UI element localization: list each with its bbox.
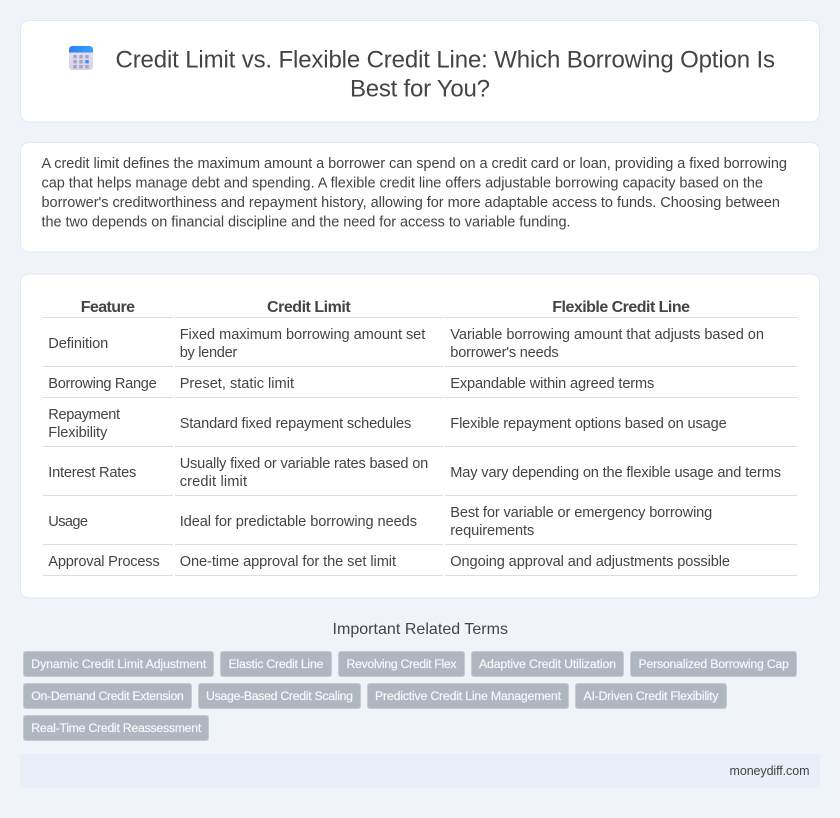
table header row [81,299,690,316]
heading: related terms: Important Related Terms [332,621,508,638]
tag: dynamic credit limit adjustment [24,652,214,676]
title: Best for You? [350,76,490,102]
tag: predictive credit line management: Predictive Credit Line Management [375,689,562,703]
table header row: Credit Limit [267,299,351,316]
row: repayment flexibility: Flexibility [48,425,108,441]
row: usage: Best for variable or emergency borrowing [450,505,712,521]
title [116,46,775,102]
row: interest rates: credit limit [180,474,247,490]
row: borrowing range: Borrowing Range [48,376,157,392]
row: borrowing range: Preset, static limit [180,376,294,392]
title: Credit Limit vs. Flexible Credit Line: Which Borrowing Option Is [116,46,775,74]
tag: usage-based credit scaling: Usage-Based Credit Scaling [206,689,353,703]
row: interest rates: Interest Rates [48,465,136,481]
panel: introduction [20,142,820,252]
tags: related terms [24,652,796,740]
row: repayment flexibility: Flexible repayment options based on usage [450,416,727,432]
row: borrowing range [48,376,654,392]
tag: personalized borrowing cap: Personalized Borrowing Cap [638,657,789,671]
row: approval process: Approval Process [48,554,160,570]
row: usage: requirements [450,523,534,539]
footer [20,754,820,788]
tag: ai-driven credit flexibility [576,684,726,708]
tag: dynamic credit limit adjustment: Dynamic Credit Limit Adjustment [31,657,207,671]
tag: real-time credit reassessment: Real-Time Credit Reassessment [31,721,202,735]
row: interest rates: May vary depending on the flexible usage and terms [450,465,781,481]
icon: calendar [69,46,93,70]
row: approval process [48,554,730,570]
tag: elastic credit line: Elastic Credit Line [228,657,324,671]
tag: real-time credit reassessment [24,716,208,740]
row: repayment flexibility [48,407,727,441]
row: interest rates [48,456,781,490]
text block: intro paragraph: A credit limit defines the maximum amount a borrower can spend on a credit card or loan, providing a fixed borrowing [42,156,787,172]
row: definition: Variable borrowing amount that adjusts based on [450,327,764,343]
tag: adaptive credit utilization [472,652,624,676]
row: usage [48,505,712,539]
row: approval process: One-time approval for the set limit [180,554,396,570]
tag: on-demand credit extension [24,684,192,708]
tag: adaptive credit utilization: Adaptive Credit Utilization [479,657,616,671]
row: interest rates: Usually fixed or variable rates based on [180,456,428,472]
tag: elastic credit line [220,652,332,676]
text block: intro paragraph: the two depends on financial discipline and the need for access to variable funding. [42,214,570,230]
row: repayment flexibility: Repayment [48,407,120,423]
footer text: source: moneydiff.com [730,764,810,778]
tag: predictive credit line management [368,684,568,708]
tag: revolving credit flex [338,652,464,676]
row: repayment flexibility: Standard fixed repayment schedules [180,416,411,432]
tag: on-demand credit extension: On-Demand Credit Extension [31,689,184,703]
row: definition [48,327,764,361]
panel: header [20,20,820,122]
tag: usage-based credit scaling [198,684,360,708]
panel: comparison table [20,274,820,598]
text block: intro paragraph [42,156,787,230]
row: usage: Usage [48,514,88,530]
tag: personalized borrowing cap [630,652,796,676]
table header row: Feature [81,299,135,316]
row: definition: by lender [180,345,237,361]
row: definition: borrower's needs [450,345,559,361]
row: usage: Ideal for predictable borrowing needs [180,514,417,530]
table header row: Flexible Credit Line [552,299,690,316]
row: borrowing range: Expandable within agreed terms [450,376,654,392]
tag: revolving credit flex: Revolving Credit Flex [346,657,457,671]
row: definition: Definition [48,336,108,352]
row: definition: Fixed maximum borrowing amount set [180,327,425,343]
text block: intro paragraph: cap that helps manage debt and spending. A flexible credit line offers adjustable borrowing capacity based on the [42,176,763,192]
tag: ai-driven credit flexibility: AI-Driven Credit Flexibility [584,689,719,703]
text block: intro paragraph: borrower's creditworthiness and repayment history, allowing for more adaptable access to funds. Choosing between [42,195,780,211]
row: approval process: Ongoing approval and adjustments possible [450,554,730,570]
